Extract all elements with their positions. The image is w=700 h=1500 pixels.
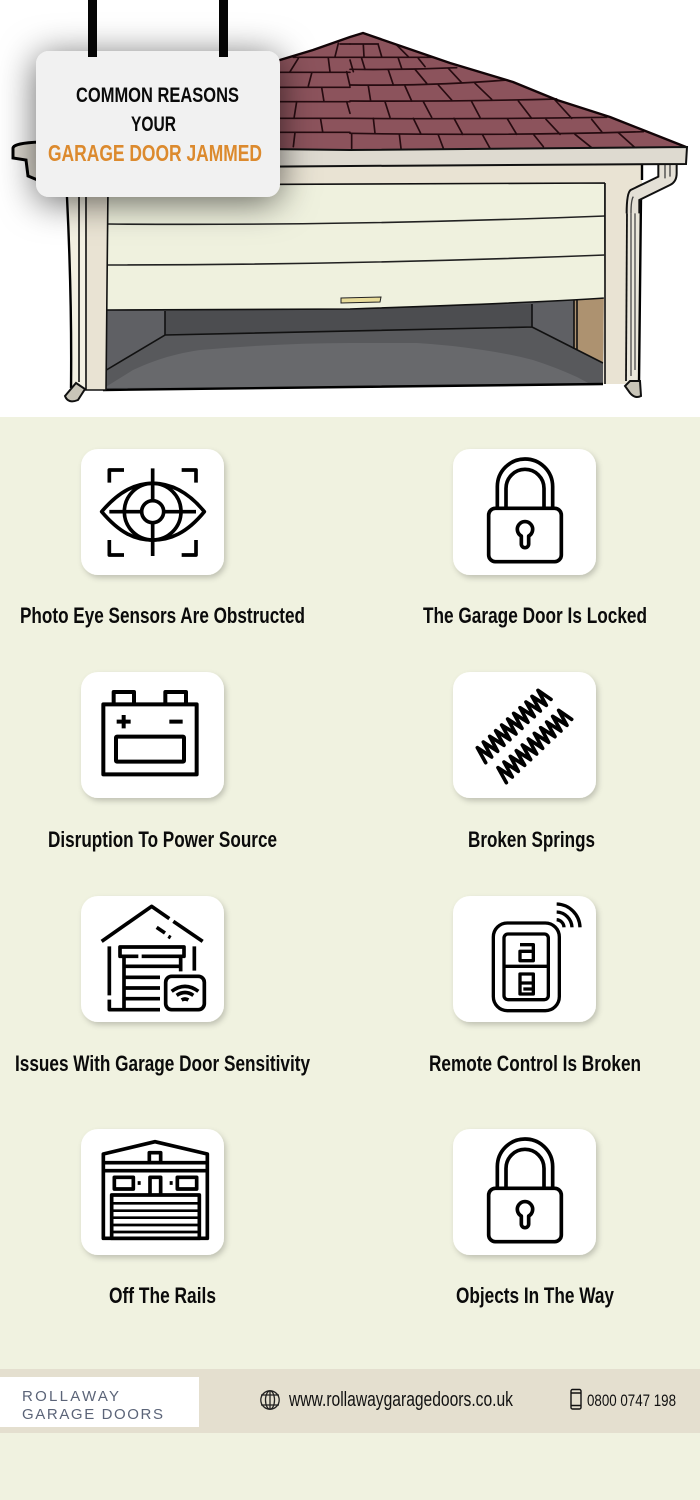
card: photo eye sensors (20, 449, 305, 628)
card: garage door locked (423, 449, 647, 628)
garage interior (103, 298, 604, 390)
label: Broken Springs (468, 827, 595, 852)
label: Remote Control Is Broken (429, 1051, 641, 1076)
card: broken springs (453, 672, 596, 852)
sign: title board (36, 0, 280, 197)
title line 3: GARAGE DOOR JAMMED (48, 140, 262, 166)
label: Photo Eye Sensors Are Obstructed (20, 603, 305, 628)
footer band (0, 1369, 700, 1433)
card: off the rails (81, 1129, 224, 1308)
sign strap right (219, 0, 228, 57)
icon: springs (477, 690, 572, 783)
icon: globe (261, 1391, 279, 1409)
icon: smart garage (102, 906, 204, 1010)
label: Issues With Garage Door Sensitivity (15, 1051, 311, 1076)
title line 1: COMMON REASONS (76, 84, 239, 107)
card: door sensitivity (15, 896, 311, 1076)
panel: reasons background (0, 417, 700, 1500)
card: objects in the way (453, 1129, 615, 1308)
garage door panels (106, 182, 605, 310)
label: Off The Rails (109, 1283, 216, 1308)
card: remote control (429, 896, 641, 1076)
phone number: 0800 0747 198 (587, 1391, 676, 1410)
title line 2: YOUR (131, 113, 176, 136)
icon: eye target (102, 468, 204, 556)
icon: phone (571, 1390, 581, 1409)
website: www.rollawaygaragedoors.co.uk (288, 1389, 514, 1411)
left gutter end (13, 142, 40, 181)
roof shingles (270, 33, 686, 151)
icon: battery (103, 692, 197, 774)
fascia board (14, 146, 687, 168)
logo panel: GARAGE DOORS (22, 1406, 163, 1423)
logo panel (0, 1377, 199, 1427)
door handle (341, 297, 381, 303)
icon: garage building (103, 1142, 207, 1238)
card: power source (48, 672, 277, 852)
sign strap left (88, 0, 97, 57)
right pillar and downspout (108, 163, 677, 397)
icon: padlock (489, 459, 561, 562)
icon: padlock (489, 1139, 561, 1242)
icon: remote with signal (493, 904, 580, 1011)
illustration: garage with jammed door (13, 33, 687, 401)
label: Disruption To Power Source (48, 827, 277, 852)
label: Objects In The Way (456, 1283, 615, 1308)
left pillar (65, 165, 108, 401)
logo panel: ROLLAWAY (22, 1388, 119, 1405)
